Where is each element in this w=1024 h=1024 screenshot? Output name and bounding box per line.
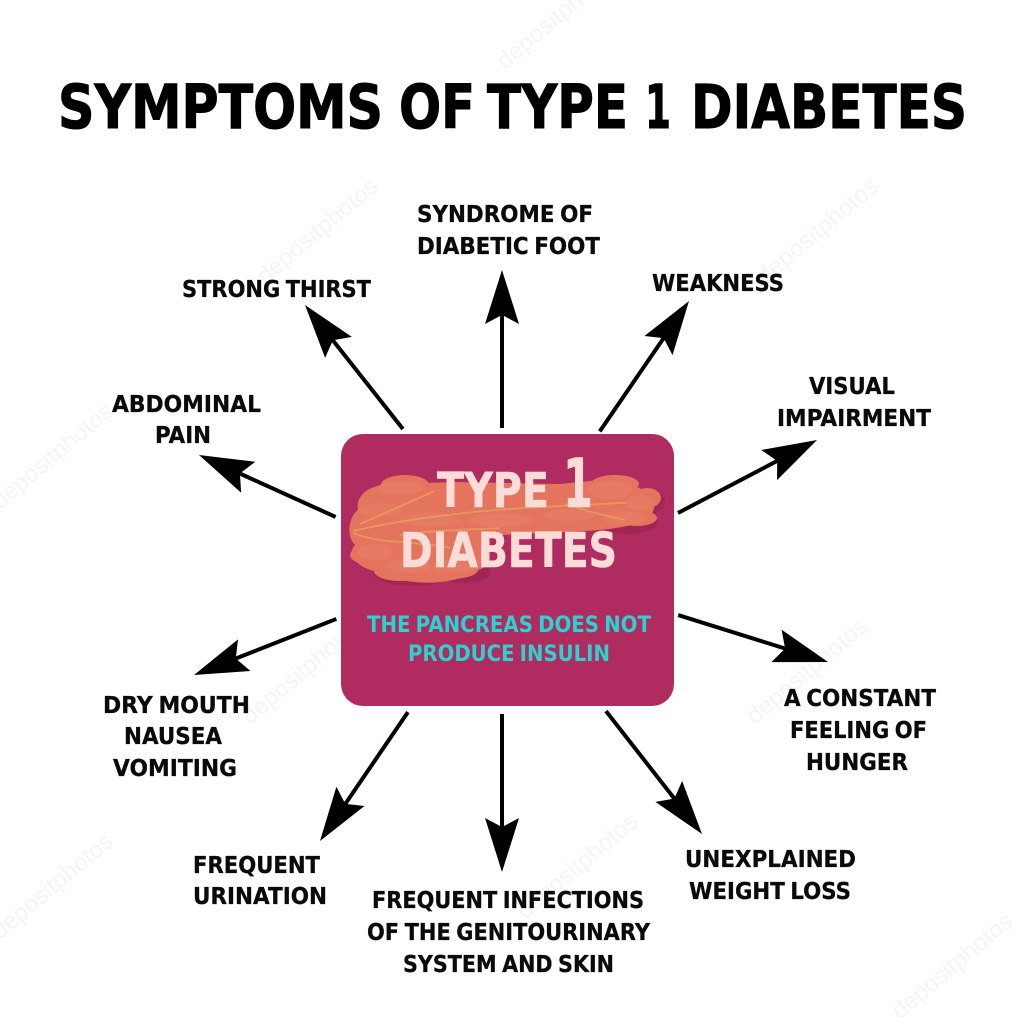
text: depositphotos [512,808,643,925]
label: dry mouth nausea vomiting: VOMITING [113,754,237,782]
heading: diabetes: DIABETES [400,523,617,579]
label: frequent infections of the genitourinary system and skin: SYSTEM AND SKIN [403,950,614,978]
label: dry mouth nausea vomiting [103,691,250,782]
text: the pancreas does not produce insulin: PRODUCE INSULIN [408,642,610,667]
label: frequent urination: URINATION [193,882,327,910]
arrow: to abdominal pain [192,440,343,532]
text: depositphotos [887,908,1018,1024]
title: 1 [645,73,671,143]
title: OF [399,73,475,143]
label: visual impairment [777,372,931,432]
label: unexplained weight loss: WEIGHT LOSS [689,877,851,905]
label: syndrome of diabetic foot [417,200,600,260]
label: a constant feeling of hunger: A CONSTANT [784,684,936,712]
label: abdominal pain [112,390,261,449]
label: syndrome of diabetic foot: SYNDROME OF [417,200,593,228]
label: a constant feeling of hunger: HUNGER [806,748,908,776]
label: frequent urination [193,851,327,910]
label: frequent infections of the genitourinary system and skin: FREQUENT INFECTIONS [372,886,644,914]
label: frequent infections of the genitourinary system and skin: OF THE GENITOURINARY [367,918,651,946]
arrow: to dry mouth nausea vomiting [188,603,343,691]
title [58,73,967,143]
label: abdominal pain: ABDOMINAL [112,390,261,418]
heading: type 1: TYPE [437,463,549,519]
arrow: to unexplained weight loss [593,701,715,844]
title: DIABETES [691,73,967,143]
text: depositphotos [252,173,383,290]
text: depositphotos [237,613,368,730]
title: TYPE [487,73,628,143]
heading: type 1 [437,445,593,524]
label: a constant feeling of hunger [784,684,936,776]
label: frequent urination: FREQUENT [193,851,320,879]
arrow: to constant feeling of hunger [673,599,833,678]
label: weakness: WEAKNESS [652,269,784,297]
title: SYMPTOMS [58,73,383,143]
arrow: to strong thirst [292,294,416,440]
label: syndrome of diabetic foot: DIABETIC FOOT [417,232,600,260]
arrow: to visual impairment [670,425,825,528]
label: abdominal pain: PAIN [155,421,211,449]
heading: type 1: 1 [563,445,593,524]
label: dry mouth nausea vomiting: DRY MOUTH [103,691,250,719]
label: frequent infections of the genitourinary system and skin [367,886,651,978]
arrow: to frequent urination [306,703,422,851]
arrow: up to syndrome of diabetic foot [485,270,519,428]
arrow: down to frequent infections [485,714,519,872]
label: visual impairment: IMPAIRMENT [777,404,931,432]
label: a constant feeling of hunger: FEELING OF [790,716,927,744]
arrow: to weakness [586,291,703,441]
text: the pancreas does not produce insulin: THE PANCREAS DOES NOT [367,613,651,638]
panel: type 1 diabetes [341,434,674,706]
label: visual impairment: VISUAL [809,372,895,400]
text: depositphotos [752,173,883,290]
text: the pancreas does not produce insulin [367,613,651,667]
text: depositphotos [742,613,873,730]
label: unexplained weight loss: UNEXPLAINED [685,845,856,873]
label: dry mouth nausea vomiting: NAUSEA [124,722,223,750]
illustration: pancreas [349,475,665,586]
label: unexplained weight loss [685,845,856,905]
label: strong thirst: STRONG THIRST [182,275,371,303]
